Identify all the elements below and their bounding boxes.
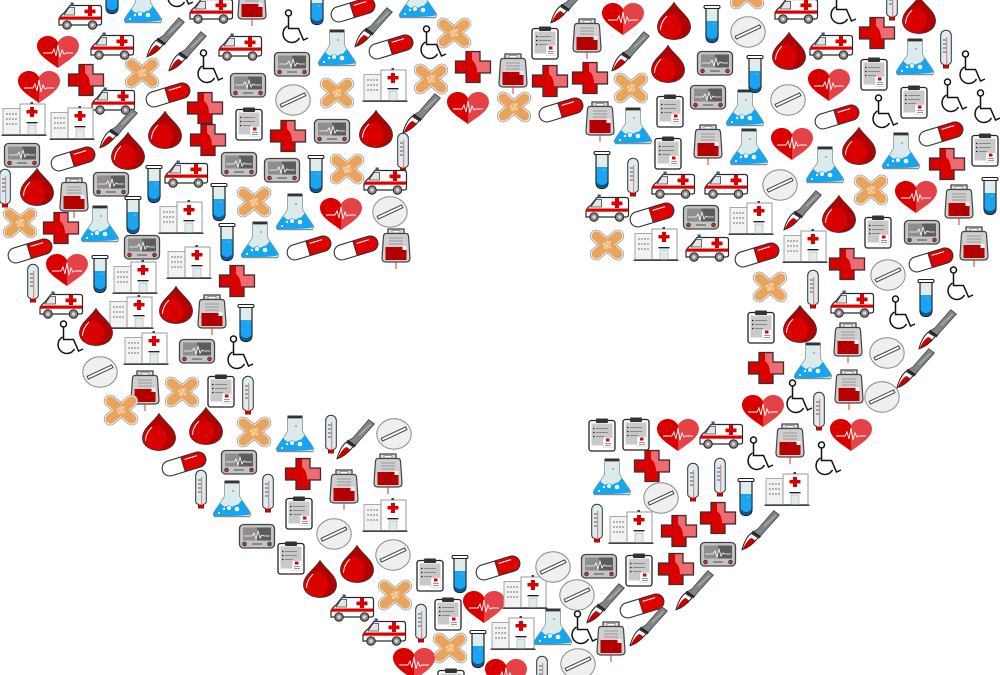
icon: blood drop [360,110,392,148]
icon: cross [456,52,490,82]
icon: hospital [490,616,536,650]
icon: pill [332,234,380,262]
icon: scalpel [672,570,715,612]
icon: test tube [104,0,120,14]
icon: flask [614,108,652,144]
icon: scalpel [333,419,376,461]
icon: test tube [704,6,720,42]
icon: tablet [644,483,678,513]
icon: monitor [264,158,300,182]
icon: test tube [982,178,998,214]
icon: flask [399,0,437,18]
icon: monitor [222,450,256,474]
icon: blood drop [822,196,856,232]
icon: cross [572,62,608,94]
icon: thermometer [416,604,426,642]
icon: clipboard [861,58,887,90]
icon: heart [742,395,784,427]
icon: blood drop [148,112,182,148]
icon: ambulance [363,618,406,645]
icon: heart [393,648,435,675]
icon: heart [830,419,872,451]
icon: bandage [235,415,273,449]
icon: wheelchair [58,321,83,353]
icon: scalpel [626,606,669,648]
icon: blood drop [902,0,936,34]
icon: blood bag [198,295,226,335]
icon: clipboard [532,26,558,59]
icon: pill [367,33,415,61]
icon: pill [49,145,97,173]
icon: flask [794,342,832,379]
icon: pill [628,201,676,229]
icon: ambulance [831,290,874,317]
icon: pill [917,120,965,148]
icon: monitor [582,554,616,578]
icon: monitor [690,86,726,109]
icon: cross [270,120,306,152]
icon: test tube [918,280,934,316]
icon: thermometer [0,169,10,207]
icon: hospital [782,229,828,263]
icon: clipboard [865,216,891,248]
icon: pill [813,103,861,131]
icon: tablet [373,197,407,227]
icon: thermometer [326,415,336,453]
icon: scalpel [143,17,186,59]
icon: blood bag [694,125,722,165]
icon: hospital [764,472,810,506]
icon: bandage [612,71,650,105]
icon: bandage [412,62,450,96]
icon: scalpel [351,7,394,49]
icon: clipboard [278,542,304,574]
icon: tablet [376,540,410,570]
icon: wheelchair [960,51,985,83]
icon: blood drop [142,414,176,450]
icon: blood bag [382,229,410,269]
icon: monitor [904,220,940,244]
icon: wheelchair [283,10,308,42]
icon: cross [286,458,320,490]
icon: tablet [731,17,765,47]
icon: ambulance [40,292,82,318]
icon: blood bag [60,178,88,218]
icon: thermometer [537,656,547,675]
icon: scalpel [780,190,823,232]
icon: tablet [771,85,805,115]
icon: tablet [865,382,899,412]
icon: blood bag [238,0,266,26]
icon: bandage [495,90,533,124]
icon: scalpel [608,31,651,73]
icon: blood drop [340,546,374,582]
icon: monitor [124,236,160,259]
icon: bandage [1,206,39,240]
icon: heart [37,36,79,68]
icon: clipboard [748,310,774,343]
icon: thermometer [814,392,824,430]
icon: test tube [594,152,610,188]
icon: cross [748,352,784,384]
icon: tablet [536,552,570,582]
icon: bandage [318,76,356,110]
icon: scalpel [165,31,208,73]
icon: hospital [50,106,94,140]
icon: clipboard [623,418,649,450]
icon: bandage [751,270,789,304]
icon: hospital [634,227,678,261]
icon: heart [895,181,937,213]
icon: hospital [608,510,654,544]
icon: thermometer [243,376,253,414]
icon: scalpel [96,108,139,150]
icon: pill [6,237,54,265]
icon: pill [144,81,192,109]
icon: ambulance [364,168,406,194]
icon: pill [618,592,666,620]
icon: scalpel [583,583,626,625]
icon: wheelchair [948,267,973,299]
icon: pill [733,241,781,269]
icon: clipboard [589,418,615,451]
icon: cross [190,124,226,156]
icon: heart [18,71,60,103]
icon: thermometer [263,474,273,512]
icon: hospital [158,200,204,234]
icon: wheelchair [421,26,446,58]
icon: tablet [317,519,351,549]
icon: cross [634,450,670,482]
icon: flask [593,458,631,495]
icon: scalpel [893,348,936,390]
icon: clipboard [417,558,443,591]
icon: monitor [94,172,128,196]
icon: test tube [219,224,235,260]
icon: cross [930,148,964,180]
icon: ambulance [686,234,728,261]
icon: thermometer [808,270,818,308]
icon: blood bag [131,371,159,411]
icon: thermometer [688,463,698,501]
icon: scalpel [738,510,781,552]
icon: wheelchair [873,95,898,127]
icon: monitor [700,542,736,566]
icon: cross [700,502,736,534]
icon: hospital [362,68,408,102]
icon: flask [213,480,251,517]
icon: test tube [125,196,141,234]
icon: blood drop [772,32,806,70]
icon: ambulance [92,88,134,114]
icon: cross [68,64,104,96]
icon: thermometer [28,264,38,302]
icon: thermometer [887,0,897,20]
icon: thermometer [592,504,602,542]
icon: test tube [309,0,325,24]
icon: flask [730,128,768,165]
icon: pill [474,554,522,582]
icon: blood drop [20,168,54,206]
icon: blood bag [834,323,862,363]
icon: heart [602,3,644,35]
icon: blood bag [330,470,358,510]
icon: scalpel [399,93,442,135]
icon: ambulance [700,422,742,448]
icon: pill [537,96,585,124]
icon: flask [318,30,356,66]
icon: clipboard [435,598,461,630]
icon: pill [160,450,208,478]
icon: blood bag [597,622,625,662]
icon: blood bag [835,370,863,410]
icon: ambulance [810,32,852,59]
icon: wheelchair [168,0,193,6]
icon: heart [485,659,527,675]
icon: monitor [314,120,350,143]
icon: ambulance [219,34,262,60]
icon: wheelchair [942,79,967,111]
icon: monitor [222,152,256,176]
icon: monitor [4,144,40,167]
icon: blood drop [160,286,192,324]
icon: tablet [763,170,797,200]
icon: bandage [588,228,626,262]
icon: test tube [92,256,108,292]
icon: test tube [238,304,254,342]
icon: wheelchair [975,90,1000,122]
icon: tablet [871,260,905,290]
icon: cross [532,66,568,96]
icon: tablet [83,357,117,387]
icon: pill [329,0,377,24]
icon: clipboard [972,134,998,166]
icon: heart [46,254,88,286]
icon: blood bag [776,424,804,464]
icon: blood bag [586,102,614,142]
icon: blood drop [112,132,144,170]
icon: blood bag [960,227,988,267]
icon: flask [276,416,314,452]
icon: ambulance [775,0,818,23]
icon: clipboard [438,668,464,675]
icon: ambulance [91,32,134,59]
icon: wheelchair [816,442,841,474]
icon: cross [830,248,864,280]
icon: blood drop [190,408,222,444]
icon: flask [896,38,934,75]
icon: bandage [123,56,161,90]
icon: heart [320,198,362,230]
icon: ambulance [586,194,628,221]
icon: ambulance [331,594,374,621]
icon: clipboard [655,136,681,169]
icon: cross [860,18,894,48]
icon: blood drop [842,128,876,164]
icon: clipboard [208,374,234,407]
icon: test tube [211,184,227,220]
icon: hospital [108,295,154,329]
icon: blood bag [374,454,402,494]
icon: bandage [435,16,473,50]
icon: hospital [2,102,46,136]
icon: wheelchair [572,611,597,643]
icon: flask [806,146,844,183]
icon: hospital [124,331,168,365]
icon: hospital [112,260,158,294]
icon: test tube [146,166,162,202]
icon: clipboard [901,86,927,118]
icon: cross [662,516,696,546]
icon: blood bag [945,185,973,225]
icon: wheelchair [890,296,915,328]
icon: test tube [738,478,754,516]
icon: blood bag [573,19,601,59]
icon: hospital [362,498,408,532]
icon: monitor [684,206,718,229]
icon: clipboard [236,108,262,140]
icon: bandage [431,631,469,665]
icon: blood drop [80,308,112,346]
icon: thermometer [398,133,408,171]
icon: test tube [470,630,486,668]
icon: heart [657,419,699,451]
icon: blood drop [784,306,816,342]
icon: tablet [377,419,411,449]
icon: test tube [747,56,763,92]
icon: flask [276,194,314,230]
icon: tablet [870,338,904,368]
icon: cross [44,212,78,244]
icon: hospital [728,201,774,235]
icon: monitor [698,52,732,75]
icon: wheelchair [228,336,253,368]
icon: monitor [274,52,310,76]
icon: bandage [102,393,140,427]
icon: wheelchair [748,437,773,469]
icon: thermometer [941,30,951,68]
icon: blood drop [304,560,336,598]
icon: bandage [376,578,414,612]
icon: ambulance [165,160,208,187]
icon: cross [220,266,254,296]
icon: flask [81,206,119,242]
icon: pill [285,234,333,262]
icon: scalpel [915,309,958,351]
icon: bandage [235,185,273,219]
icon: pill [907,246,955,274]
icon: clipboard [657,94,683,127]
icon: scalpel [547,0,590,25]
icon: ambulance [190,0,232,23]
icon: monitor [240,524,274,548]
icon: blood bag [499,54,527,94]
icon: flask [882,132,920,169]
icon: flask [241,222,279,258]
icon: monitor [230,74,266,97]
icon: test tube [308,156,324,192]
icon: ambulance [59,2,102,29]
icon: wheelchair [831,0,856,23]
icon: bandage [852,173,890,207]
icon: heart [447,92,489,124]
icon: heart [771,128,813,160]
icon: ambulance [652,172,694,198]
icon: flask [534,608,572,645]
icon: flask [124,0,162,23]
icon: clipboard [626,554,652,586]
icon: wheelchair [787,380,812,412]
icon: hospital [502,575,548,609]
icon: bandage [328,152,366,186]
icon: tablet [276,85,310,115]
icon: ambulance [705,172,748,198]
icon: thermometer [628,158,638,196]
icon: heart [463,591,505,623]
icon: blood drop [658,2,690,40]
icon: test tube [452,556,468,592]
icon: wheelchair [198,50,223,82]
icon: bandage [163,375,201,409]
icon: heart [808,69,850,101]
icon: bandage [728,0,766,11]
icon: monitor [180,340,214,363]
icon: thermometer [715,458,725,496]
icon: cross [658,554,694,584]
icon: blood drop [652,46,684,82]
icon: thermometer [196,470,206,508]
icon: tablet [561,649,595,675]
icon: cross [188,92,222,124]
icon: hospital [166,245,212,279]
icon: tablet [560,580,594,610]
icon: clipboard [286,496,312,529]
icon: flask [726,90,764,126]
